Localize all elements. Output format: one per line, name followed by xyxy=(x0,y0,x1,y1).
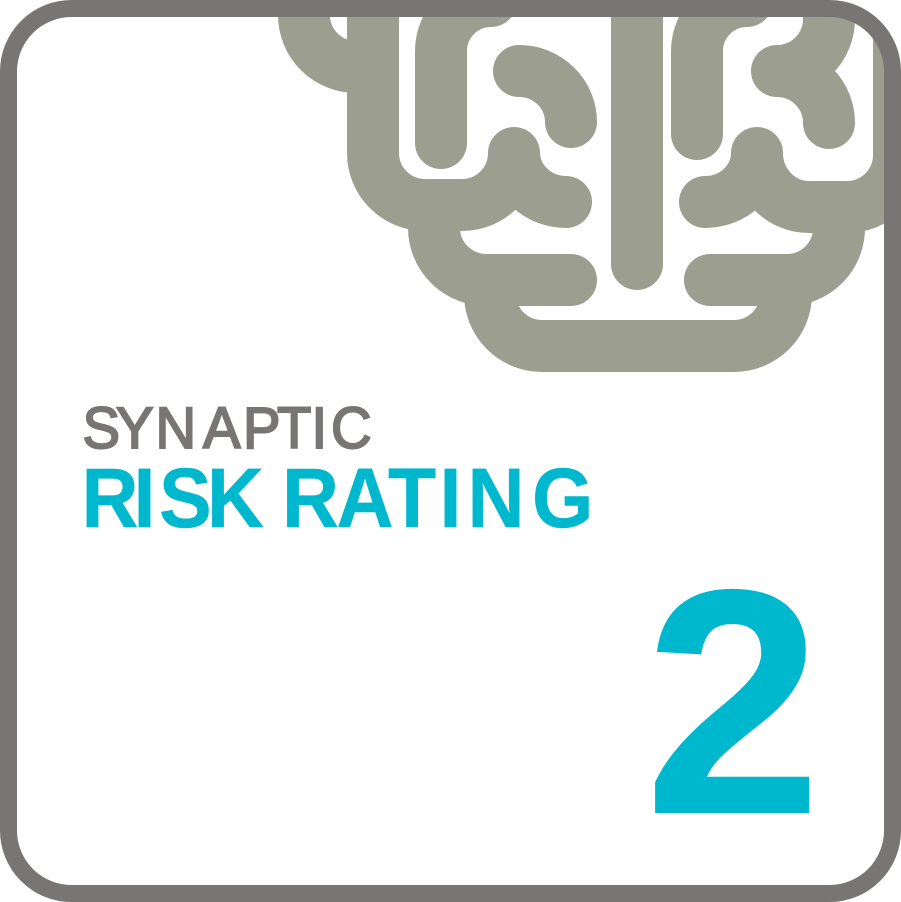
heading: risk rating: RISK RATING xyxy=(81,452,593,546)
heading: synaptic: SYNAPTIC xyxy=(83,396,372,461)
icon: brain xyxy=(304,0,899,346)
rating number: 2 xyxy=(644,523,822,882)
